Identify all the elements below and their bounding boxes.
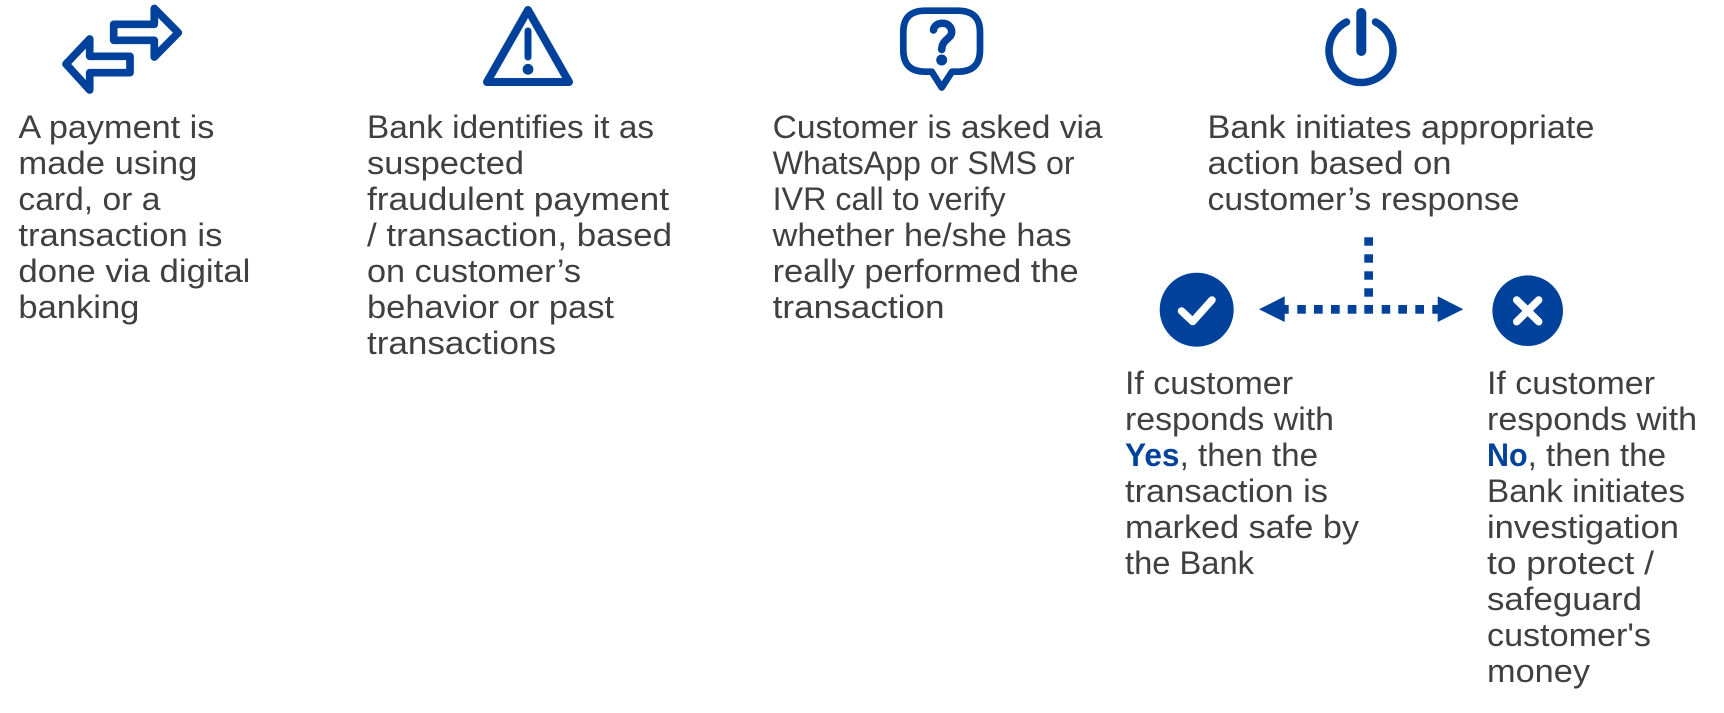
arrow: dashed branch to yes and no xyxy=(1259,237,1463,322)
text: step 3 customer asked: Customer is asked via xyxy=(773,109,1103,145)
icon: warning triangle xyxy=(487,10,569,82)
text: step 1 payment made: banking xyxy=(18,289,139,325)
text: step 3 customer asked: really performed the xyxy=(773,253,1079,289)
text: step 2 bank identifies xyxy=(367,109,672,361)
icon: yes check circle xyxy=(1160,273,1234,347)
text: step 2 bank identifies: on customer’s xyxy=(367,253,581,289)
text: step 4 bank initiates action: action based on xyxy=(1208,145,1452,181)
text: no outcome: customer's xyxy=(1487,617,1651,653)
text: step 3 customer asked: transaction xyxy=(773,289,945,325)
text: step 2 bank identifies: / transaction, based xyxy=(367,217,672,253)
text: step 4 bank initiates action: customer’s response xyxy=(1208,181,1520,217)
text: yes outcome xyxy=(1125,365,1359,581)
icon: power button xyxy=(1329,13,1393,83)
text: yes outcome: marked safe by xyxy=(1125,509,1359,545)
text: step 4 bank initiates action: Bank initiates appropriate xyxy=(1208,109,1594,145)
text: yes outcome: Yes xyxy=(1125,437,1180,473)
text: no outcome: to protect / xyxy=(1487,545,1654,581)
text: step 1 payment made: transaction is xyxy=(18,217,222,253)
text: step 3 customer asked: IVR call to verify xyxy=(773,181,1006,217)
text: step 1 payment made xyxy=(18,109,250,325)
text: step 2 bank identifies: suspected xyxy=(367,145,524,181)
text: no outcome: money xyxy=(1487,653,1590,689)
text: step 3 customer asked: WhatsApp or SMS or xyxy=(773,145,1075,181)
text: step 2 bank identifies: transactions xyxy=(367,325,556,361)
text: step 1 payment made: card, or a xyxy=(18,181,161,217)
text: step 2 bank identifies: fraudulent payment xyxy=(367,181,669,217)
text: no outcome: safeguard xyxy=(1487,581,1642,617)
text: yes outcome: responds with xyxy=(1125,401,1334,437)
text: step 2 bank identifies: behavior or past xyxy=(367,289,614,325)
icon: question speech bubble xyxy=(903,11,980,88)
text: step 1 payment made: A payment is xyxy=(18,109,214,145)
text: no outcome: Bank initiates xyxy=(1487,473,1685,509)
text: step 3 customer asked: whether he/she has xyxy=(772,217,1072,253)
icon: exchange arrows xyxy=(66,8,178,90)
text: step 2 bank identifies: Bank identifies it as xyxy=(367,109,654,145)
text: step 1 payment made: made using xyxy=(18,145,197,181)
text: step 1 payment made: done via digital xyxy=(18,253,250,289)
text: no outcome: If customer xyxy=(1487,365,1655,401)
text: step 4 bank initiates action xyxy=(1208,109,1594,217)
text: no outcome: responds with xyxy=(1487,401,1697,437)
text: yes outcome: , then the xyxy=(1180,437,1318,473)
text: no outcome: , then the xyxy=(1528,437,1666,473)
text: yes outcome: the Bank xyxy=(1125,545,1255,581)
text: yes outcome: transaction is xyxy=(1125,473,1328,509)
text: no outcome: investigation xyxy=(1487,509,1679,545)
text: step 3 customer asked xyxy=(772,109,1103,325)
text: yes outcome: If customer xyxy=(1125,365,1293,401)
icon: no cross circle xyxy=(1492,275,1563,346)
text: no outcome: No xyxy=(1487,437,1528,473)
text: no outcome xyxy=(1487,365,1697,689)
